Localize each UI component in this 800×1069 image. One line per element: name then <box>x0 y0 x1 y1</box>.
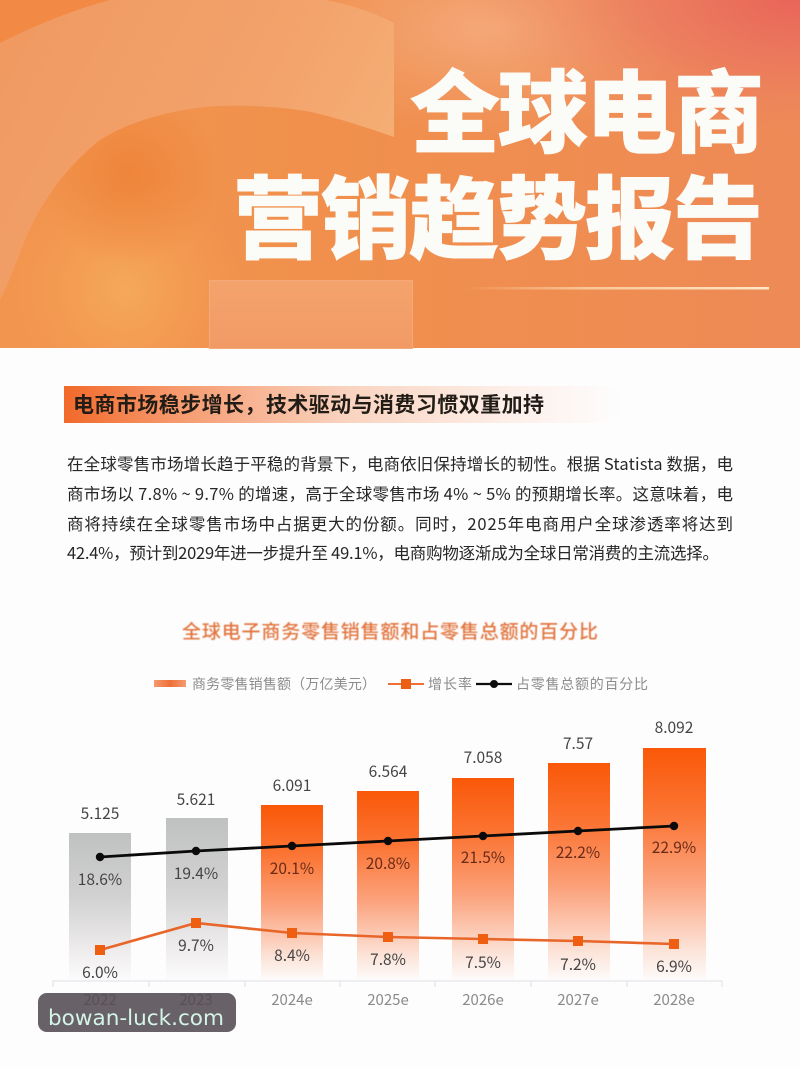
title: 全球电商 <box>410 41 764 171</box>
axis <box>53 981 722 987</box>
growth percentage labels: 6.9% <box>656 955 692 977</box>
year axis labels: 2023 <box>179 989 213 1010</box>
share percentage labels: 22.2% <box>556 841 600 863</box>
line: growth rate <box>95 918 679 955</box>
chart legend <box>154 674 648 694</box>
growth percentage labels: 7.5% <box>465 951 501 973</box>
sales value labels: 5.125 <box>81 802 119 824</box>
section heading bar <box>64 386 626 423</box>
share percentage labels: 20.1% <box>270 857 314 879</box>
year axis labels: 2024e <box>271 989 313 1010</box>
bars: retail e-commerce sales <box>69 748 706 980</box>
text block: intro paragraph <box>67 451 733 564</box>
growth percentage labels: 8.4% <box>274 944 310 966</box>
share percentage labels <box>78 836 696 890</box>
title: 营销趋势报告 <box>233 147 763 277</box>
watermark badge: bowan-luck.com <box>48 1006 224 1031</box>
sales value labels: 8.092 <box>655 716 693 738</box>
sales value labels: 7.058 <box>464 746 502 768</box>
year axis labels: 2028e <box>653 989 695 1010</box>
year axis labels <box>83 989 695 1010</box>
growth percentage labels: 7.8% <box>370 948 406 970</box>
section heading bar: 电商市场稳步增长，技术驱动与消费习惯双重加持 <box>73 389 544 419</box>
watermark badge <box>38 993 236 1032</box>
sales value labels <box>81 716 693 824</box>
growth percentage labels: 7.2% <box>560 953 596 975</box>
year axis labels: 2026e <box>462 989 504 1010</box>
chart legend: 商务零售销售额（万亿美元） <box>192 674 376 694</box>
share percentage labels: 20.8% <box>366 852 410 874</box>
share percentage labels: 21.5% <box>461 846 505 868</box>
growth percentage labels <box>82 934 692 983</box>
sales value labels: 6.091 <box>273 774 311 796</box>
chart title: 全球电子商务零售销售额和占零售总额的百分比 <box>182 617 598 644</box>
text block: intro paragraph: 商将持续在全球零售市场中占据更大的份额。同时，2025年电商用户全球渗透率将达到 <box>67 511 733 535</box>
share percentage labels: 18.6% <box>78 868 122 890</box>
line: share of total retail <box>96 822 678 861</box>
text block: intro paragraph: 42.4%，预计到2029年进一步提升至 49.1%，电商购物逐渐成为全球日常消费的主流选择。 <box>67 540 719 564</box>
year axis labels: 2027e <box>557 989 599 1010</box>
bar chart <box>53 716 722 1010</box>
share percentage labels: 19.4% <box>174 862 218 884</box>
year axis labels: 2025e <box>367 989 409 1010</box>
chart legend: 占零售总额的百分比 <box>516 674 648 694</box>
growth percentage labels: 6.0% <box>82 961 118 983</box>
panel: header banner <box>0 0 800 348</box>
year axis labels: 2022 <box>83 989 117 1010</box>
sales value labels: 7.57 <box>563 732 593 754</box>
text block: intro paragraph: 商市场以 7.8% ~ 9.7% 的增速，高于全球零售市场 4% ~ 5% 的预期增长率。这意味着，电 <box>67 481 733 505</box>
sales value labels: 6.564 <box>369 760 408 782</box>
title <box>233 41 764 277</box>
sales value labels: 5.621 <box>177 788 215 810</box>
text block: intro paragraph: 在全球零售市场增长趋于平稳的背景下，电商依旧保持增长的韧性。根据 Statista 数据，电 <box>67 451 733 475</box>
chart legend: 增长率 <box>428 674 472 694</box>
growth percentage labels: 9.7% <box>178 934 214 956</box>
share percentage labels: 22.9% <box>652 836 696 858</box>
